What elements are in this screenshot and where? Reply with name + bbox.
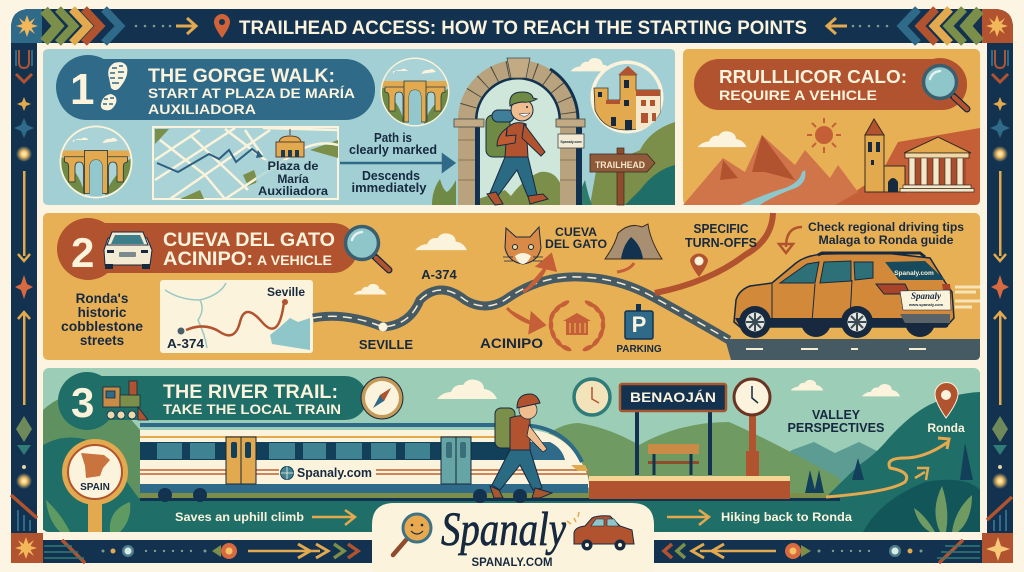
label: Ronda: Ronda [927, 421, 965, 435]
roof rail [818, 253, 925, 257]
icon: cave [605, 224, 662, 259]
note: path is clearly marked: Path is [374, 131, 412, 145]
note: cobblestone streets: historic [78, 305, 127, 320]
label: Seville: SEVILLE [359, 337, 413, 352]
note: hiking back to Ronda: Hiking back to Ronda [721, 510, 852, 524]
pill subheading [163, 249, 332, 270]
front wheel [739, 306, 771, 338]
label: Acinipo: ACINIPO [480, 335, 543, 351]
rust side road [655, 213, 773, 293]
note: path is clearly marked: clearly marked [349, 143, 437, 157]
train wheels [158, 488, 527, 503]
pill heading: RRULLLICOR CALO: [719, 67, 907, 87]
icon: location pin [214, 14, 230, 38]
hiker figure [486, 92, 548, 205]
step three header pill [58, 372, 367, 430]
rear plate: www.spanaly.com [908, 302, 944, 307]
note: descends immediately: Descends [362, 169, 420, 183]
corner tile: bottom right [982, 533, 1013, 563]
note: path is clearly marked [349, 131, 437, 157]
pill subheading: TAKE THE LOCAL TRAIN [163, 401, 341, 417]
logo url: SPANALY.COM [472, 557, 552, 569]
SUV car [734, 253, 980, 338]
icon: logo car [574, 516, 634, 550]
icon: plaza church [276, 129, 304, 157]
label: valley perspectives [788, 407, 885, 435]
title heading [214, 14, 807, 39]
map label: María [277, 172, 309, 186]
windows [780, 261, 873, 283]
logo sparkle [567, 512, 579, 524]
route line [157, 149, 260, 172]
panel 2: cueva del gato and acinipo [43, 213, 980, 360]
icon: boot print [101, 62, 127, 110]
trailhead signpost [590, 148, 655, 205]
bottom border ornaments right [664, 543, 980, 559]
note: check regional driving tips [808, 220, 964, 247]
icon: magnifying glass [924, 66, 967, 109]
icon: car front [104, 232, 152, 269]
map label [256, 159, 330, 198]
icon: parking sign [625, 304, 653, 339]
backpack [486, 110, 514, 157]
icon: turn-off pin [690, 254, 708, 277]
door: teal [441, 437, 471, 484]
panel background [43, 49, 675, 205]
header dotted arrow right [827, 18, 888, 34]
station sign [620, 384, 726, 475]
flat road with dashes [725, 339, 980, 360]
hiker with backpack [490, 394, 552, 498]
label: Cueva del Gato: DEL GATO [545, 237, 607, 251]
map label: Plaza de [268, 159, 319, 173]
spain sign [62, 439, 128, 532]
motion streaks [955, 287, 980, 307]
panel background [683, 49, 980, 205]
arrow to acinipo [507, 308, 544, 332]
corner tile: top left [11, 9, 42, 43]
header dotted arrow left [135, 18, 196, 34]
rear window [885, 261, 945, 280]
rear plate: Spanaly [911, 291, 942, 301]
arrow [667, 510, 709, 525]
icon: laurel wreath temple [548, 299, 606, 353]
title text: TRAILHEAD ACCESS: HOW TO REACH THE STARTING POINTS [239, 17, 807, 39]
label: Cueva del Gato [545, 225, 607, 251]
map labels: Seville [267, 285, 305, 299]
station clock on pole [734, 379, 770, 476]
small plaque: Spanaly.com [560, 140, 582, 144]
pill subheading: START AT PLAZA DE MARÍA [148, 86, 355, 101]
train branding: Spanaly.com [297, 466, 372, 480]
pill subheading: A VEHICLE [257, 253, 332, 268]
note: check regional driving tips: Malaga to Ronda guide [818, 233, 954, 247]
step two header pill [57, 218, 358, 280]
label: Parking: PARKING [616, 344, 662, 355]
label: A-374: A-374 [421, 267, 457, 282]
landscape [43, 380, 980, 530]
panel 1: the gorge walk [43, 49, 675, 205]
winding road [313, 277, 729, 340]
note: cobblestone streets [61, 291, 144, 348]
icon: old town building [590, 60, 664, 134]
street map [153, 127, 338, 199]
SUV car: Spanaly.com [894, 270, 934, 277]
step one header pill: AUXILIADORA [148, 102, 256, 117]
arrow to cave [523, 255, 555, 292]
train branding [279, 463, 376, 482]
label: specific turn-offs [685, 222, 757, 250]
logo panel: spanaly [372, 503, 654, 572]
train [140, 425, 589, 503]
pill subheading: ACINIPO: [163, 249, 253, 270]
note: cobblestone streets: cobblestone [61, 319, 144, 334]
header chevrons left [44, 9, 120, 43]
pill heading: THE RIVER TRAIL: [163, 382, 338, 403]
step one header pill [56, 55, 375, 120]
curved arrow [779, 227, 802, 253]
small plaque [558, 134, 584, 148]
icon: smiley magnifier [393, 514, 431, 555]
left border ornaments [11, 50, 85, 563]
icon: grass tuft [432, 179, 456, 205]
note: cobblestone streets: streets [80, 333, 124, 348]
header chevrons right [902, 9, 980, 43]
spain label: SPAIN [80, 482, 110, 493]
icon: wall clock [574, 379, 610, 415]
icon: puente bridge upper [380, 58, 450, 126]
foliage left [46, 500, 130, 532]
clouds [354, 233, 467, 294]
label: valley perspectives: PERSPECTIVES [788, 420, 885, 435]
small trail arrow [915, 468, 928, 480]
scenery behind hiker [571, 58, 675, 205]
panel background [43, 368, 980, 532]
panel 3: the river trail [43, 368, 980, 532]
rear plate [900, 290, 951, 310]
door lines [772, 280, 852, 322]
far wheels [801, 307, 935, 337]
icon: ronda pin [935, 383, 958, 418]
icon: greek temple [900, 137, 974, 192]
car body [734, 253, 954, 327]
bottom border ornaments left [44, 543, 358, 559]
right border ornaments [939, 50, 1012, 563]
icon: steam locomotive [103, 381, 148, 420]
inset map: A-374 [167, 337, 204, 351]
scenery [683, 128, 980, 205]
step number: 2 [71, 229, 94, 276]
icon: compass [361, 377, 403, 419]
arrow [312, 510, 355, 525]
map label: Auxiliadora [258, 184, 328, 198]
rear wheel [841, 306, 873, 338]
pill heading: THE GORGE WALK: [148, 66, 335, 87]
icon: bench [648, 444, 699, 475]
logo wordmark: Spanaly [441, 503, 567, 556]
note: saves an uphill climb: Saves an uphill climb [175, 510, 304, 524]
panel 1b: vehicle sites [683, 49, 980, 205]
icon: sun [807, 118, 841, 153]
arrow to arch [340, 155, 454, 171]
ground rail and lower band [43, 498, 980, 532]
trailhead signpost: TRAILHEAD [595, 160, 645, 171]
panel background [43, 213, 980, 360]
header pill [694, 58, 967, 110]
corner tile: bottom left [11, 533, 43, 563]
note: check regional driving tips: Check regional driving tips [808, 220, 964, 234]
station sign: BENAOJÁN [630, 389, 716, 405]
corner tile: top right [982, 9, 1013, 43]
route [186, 302, 284, 335]
pill subheading: REQUIRE A VEHICLE [719, 87, 877, 103]
step number: 3 [71, 379, 94, 426]
label: specific turn-offs: SPECIFIC [694, 222, 748, 236]
winding trail arrow [826, 438, 949, 497]
step number: 1 [70, 65, 94, 114]
label: specific turn-offs: TURN-OFFS [685, 236, 757, 250]
note: cobblestone streets: Ronda's [76, 291, 128, 306]
icon: map of spain [81, 453, 110, 478]
icon: cat face [503, 227, 543, 264]
door: yellow [226, 437, 256, 484]
platform [589, 476, 790, 499]
stone arch [454, 58, 585, 205]
pill heading: CUEVA DEL GATO [163, 230, 335, 251]
icon: parking sign: P [632, 312, 646, 337]
icon: bell tower [865, 119, 905, 192]
foliage right [863, 480, 980, 532]
headlight [571, 465, 588, 471]
note: descends immediately [352, 169, 427, 195]
label: Cueva del Gato: CUEVA [555, 225, 597, 239]
icon: puente bridge lower [60, 126, 132, 198]
icon: magnifying glass [346, 226, 389, 270]
taillights and bumper [876, 284, 908, 294]
inset map [160, 280, 313, 353]
label: valley perspectives: VALLEY [812, 407, 860, 422]
note: descends immediately: immediately [352, 181, 427, 195]
rust connector arrow to cave [617, 263, 634, 272]
